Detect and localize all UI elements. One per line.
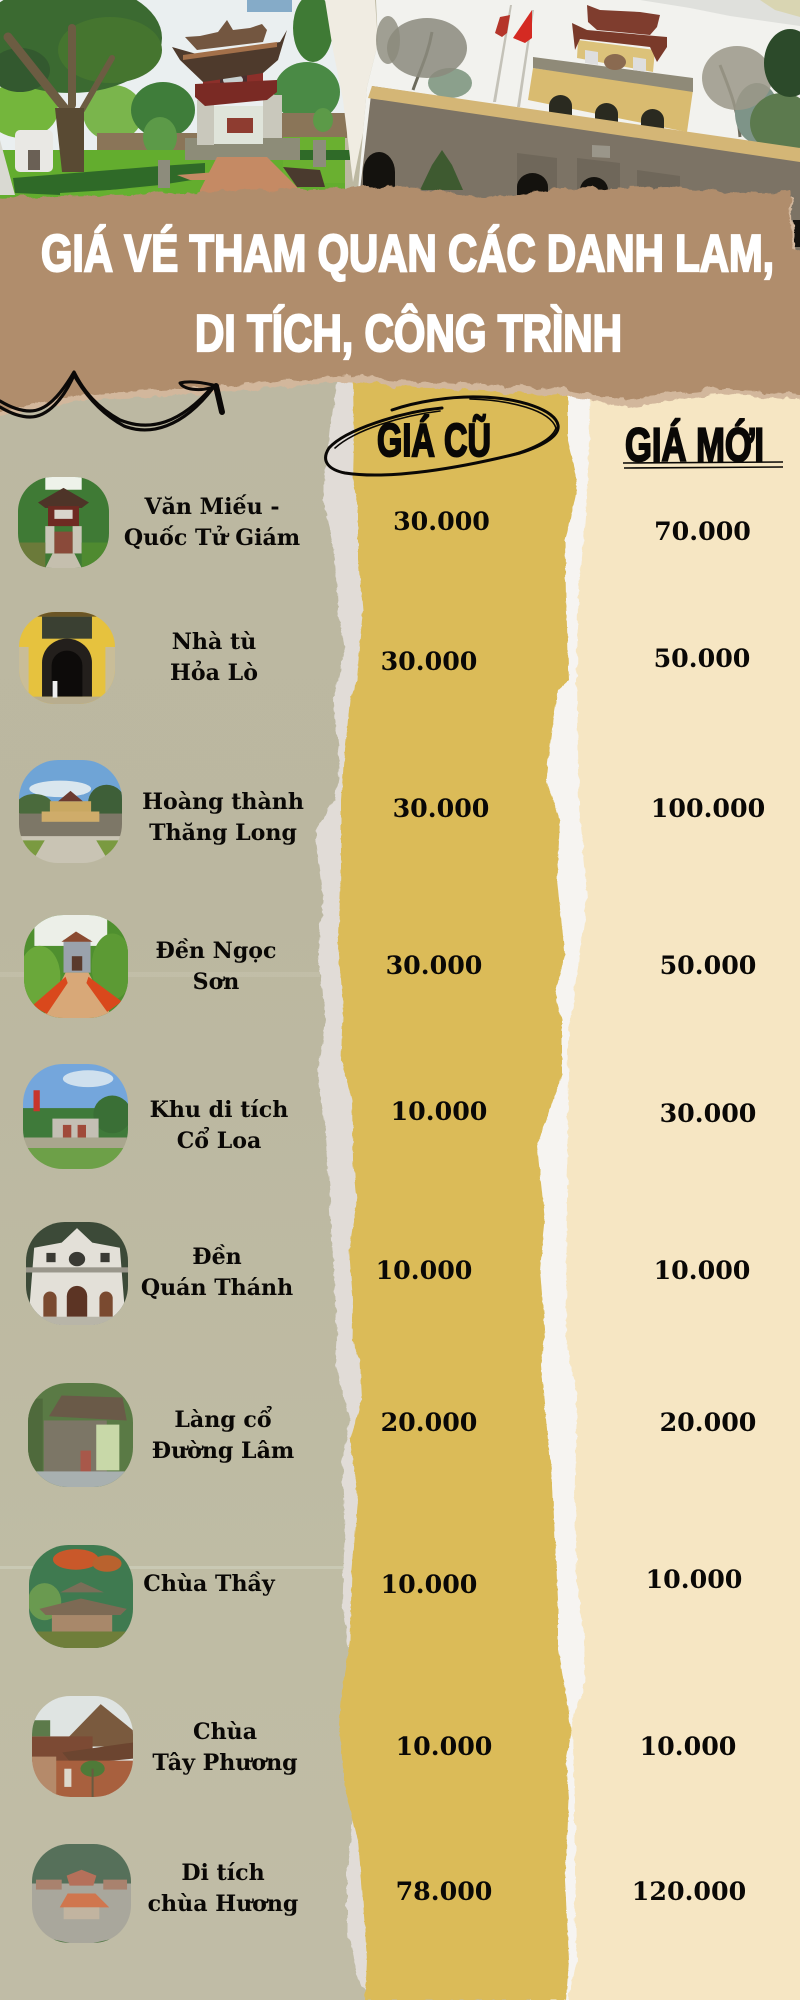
new price: Đền Ngọc Sơn: 50.000 bbox=[660, 950, 756, 980]
new price: Chùa Thầy: 10.000 bbox=[646, 1564, 742, 1594]
icon: Chùa Thầy thumbnail bbox=[29, 1545, 133, 1648]
torn white strip between photos bbox=[325, 0, 378, 182]
old price: Chùa Thầy: 10.000 bbox=[381, 1569, 477, 1599]
label: Văn Miếu bbox=[124, 494, 300, 551]
icon: Hỏa Lò thumbnail bbox=[19, 612, 115, 704]
label: Hỏa Lò: Nhà tù bbox=[172, 629, 256, 655]
old price: Đền Quán Thánh: 10.000 bbox=[376, 1255, 472, 1285]
label: Cổ Loa: Cổ Loa bbox=[177, 1128, 261, 1154]
label: Đền Quán Thánh: Quán Thánh bbox=[141, 1275, 293, 1301]
label: Di tích chùa Hương: chùa Hương bbox=[148, 1891, 298, 1917]
photo: Hoàng thành Thăng Long gate bbox=[352, 0, 800, 260]
old price: Đền Ngọc Sơn: 30.000 bbox=[386, 950, 482, 980]
old price: Cổ Loa: 10.000 bbox=[391, 1096, 487, 1126]
title: DI TÍCH, CÔNG TRÌNH bbox=[195, 304, 622, 363]
label: Hoàng thành Thăng Long: Thăng Long bbox=[149, 820, 297, 846]
label: Hoàng thành Thăng Long bbox=[142, 789, 304, 846]
right white torn strip bbox=[530, 380, 590, 2000]
new price: Làng cổ Đường Lâm: 20.000 bbox=[660, 1407, 756, 1437]
old price: Hoàng thành Thăng Long: 30.000 bbox=[393, 793, 489, 823]
new price: Đền Quán Thánh: 10.000 bbox=[654, 1255, 750, 1285]
label: Văn Miếu: Quốc Tử Giám bbox=[124, 525, 300, 551]
label: Làng cổ Đường Lâm: Làng cổ bbox=[174, 1407, 272, 1433]
label: Cổ Loa: Khu di tích bbox=[150, 1097, 288, 1123]
icon: Hoàng thành Thăng Long thumbnail bbox=[19, 760, 122, 863]
label: Đền Ngọc Sơn: Đền Ngọc bbox=[156, 938, 276, 964]
new price: Hỏa Lò: 50.000 bbox=[654, 643, 750, 673]
icon: Làng cổ Đường Lâm thumbnail bbox=[28, 1383, 133, 1487]
new price: Chùa Tây Phương: 10.000 bbox=[640, 1731, 736, 1761]
label: Đền Quán Thánh bbox=[141, 1244, 293, 1301]
panel: header photos bbox=[0, 0, 800, 250]
label: Văn Miếu: Văn Miếu - bbox=[144, 494, 280, 520]
label: Đền Quán Thánh: Đền bbox=[192, 1244, 242, 1270]
new price: Văn Miếu: 70.000 bbox=[654, 516, 751, 546]
label: Đền Ngọc Sơn: Sơn bbox=[193, 969, 239, 995]
cream column bbox=[560, 380, 800, 2000]
old price: Di tích chùa Hương: 78.000 bbox=[396, 1876, 492, 1906]
label: Làng cổ Đường Lâm bbox=[152, 1406, 294, 1464]
new price: Di tích chùa Hương: 120.000 bbox=[632, 1876, 746, 1906]
new price: Cổ Loa: 30.000 bbox=[660, 1098, 756, 1128]
icon: Cổ Loa thumbnail bbox=[23, 1064, 128, 1169]
left white torn strip bbox=[315, 380, 380, 2000]
icon: Di tích chùa Hương thumbnail bbox=[32, 1844, 131, 1943]
photo: Văn Miếu gate bbox=[0, 0, 350, 205]
icon: Chùa Tây Phương thumbnail bbox=[32, 1696, 133, 1797]
icon: Đền Ngọc Sơn thumbnail bbox=[24, 915, 128, 1018]
icon: Văn Miếu thumbnail bbox=[18, 477, 109, 568]
label: Chùa Thầy: Chùa Thầy bbox=[143, 1571, 275, 1597]
label: Cổ Loa bbox=[150, 1097, 288, 1154]
icon: Đền Quán Thánh thumbnail bbox=[26, 1222, 128, 1325]
new price: Hoàng thành Thăng Long: 100.000 bbox=[651, 793, 765, 823]
panel: torn kraft title banner bbox=[0, 184, 800, 416]
old price: Văn Miếu: 30.000 bbox=[393, 506, 490, 536]
label: Chùa Tây Phương bbox=[152, 1719, 298, 1776]
heading: Giá cũ circled: GIÁ CŨ bbox=[377, 414, 491, 466]
label: Hỏa Lò bbox=[170, 629, 258, 686]
label: Chùa Tây Phương: Tây Phương bbox=[152, 1750, 298, 1776]
arrow: hand-drawn squiggle bbox=[0, 370, 225, 432]
old price: Hỏa Lò: 30.000 bbox=[381, 646, 477, 676]
label: Hoàng thành Thăng Long: Hoàng thành bbox=[142, 789, 304, 815]
label: Di tích chùa Hương bbox=[148, 1860, 298, 1917]
label: Đền Ngọc Sơn bbox=[156, 938, 276, 995]
label: Làng cổ Đường Lâm: Đường Lâm bbox=[152, 1438, 294, 1464]
label: Di tích chùa Hương: Di tích bbox=[181, 1860, 265, 1886]
old price: Chùa Tây Phương: 10.000 bbox=[396, 1731, 492, 1761]
label: Hỏa Lò: Hỏa Lò bbox=[170, 660, 258, 686]
title bbox=[41, 224, 774, 363]
label: Chùa Tây Phương: Chùa bbox=[193, 1719, 257, 1745]
heading: Giá cũ circled bbox=[324, 395, 560, 476]
yellow column bbox=[338, 380, 577, 2000]
old price: Làng cổ Đường Lâm: 20.000 bbox=[381, 1407, 477, 1437]
